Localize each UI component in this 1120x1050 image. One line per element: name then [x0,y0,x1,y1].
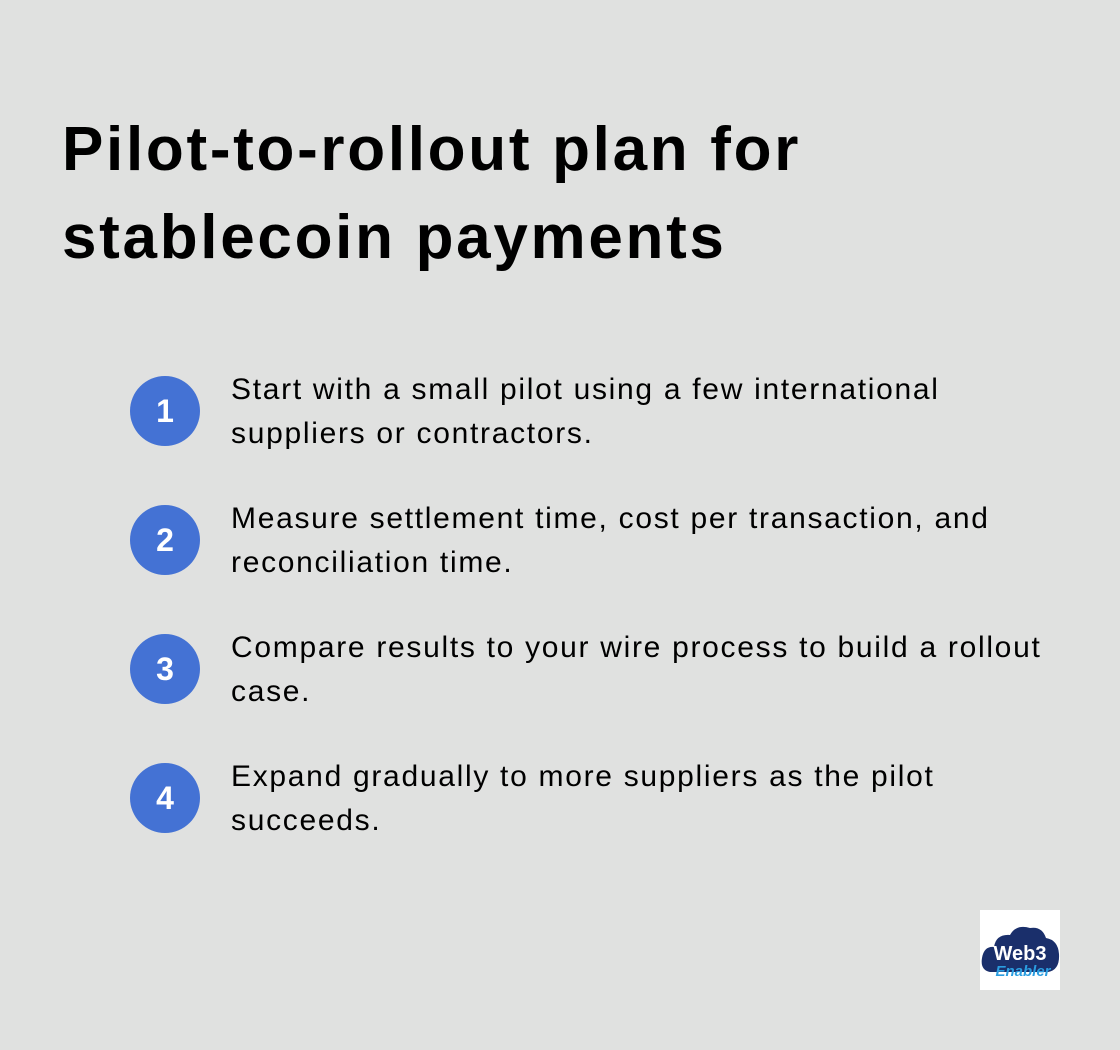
text 1: Start with a small pilot using a few international [231,373,940,406]
circle 1 [130,376,200,446]
logo: Web3 [994,943,1046,965]
step 1 [130,373,940,450]
circle 4 [130,763,200,833]
text 3: case. [231,675,311,708]
step 2 [130,502,990,579]
text 4: Expand gradually to more suppliers as the pilot [231,760,935,793]
title [62,115,801,272]
title: Pilot-to-rollout plan for [62,115,801,184]
circle 2 [130,505,200,575]
circle 2: 2 [156,522,174,558]
logo: Enabler [995,963,1052,980]
logo [980,910,1060,990]
title: stablecoin payments [62,203,727,272]
text 3: Compare results to your wire process to build a rollout [231,631,1041,664]
text 4 [231,760,935,837]
step 4 [130,760,935,837]
text 1 [231,373,940,450]
circle 3: 3 [156,651,174,687]
circle 4: 4 [156,780,174,816]
text 4: succeeds. [231,804,381,837]
text 2 [231,502,990,579]
text 2: Measure settlement time, cost per transaction, and [231,502,990,535]
circle 3 [130,634,200,704]
step 3 [130,631,1041,708]
text 1: suppliers or contractors. [231,417,594,450]
circle 1: 1 [156,393,174,429]
text 2: reconciliation time. [231,546,513,579]
text 3 [231,631,1041,708]
